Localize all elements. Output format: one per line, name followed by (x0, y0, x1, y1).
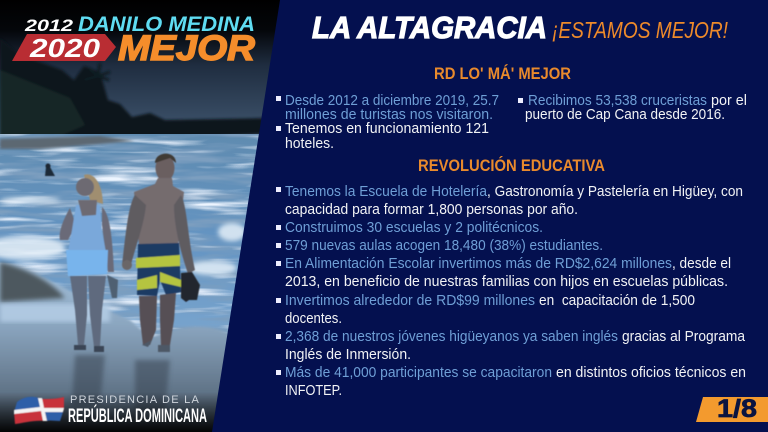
panel: navy content background (212, 0, 768, 432)
text block: education list: en capacitación de 1,500 (539, 292, 695, 309)
palm trees (0, 38, 270, 146)
text block: education list: capacidad para formar 1,800 personas por año. (285, 201, 578, 218)
page badge 1/8 (696, 395, 768, 423)
text block: education list: en distintos oficios técnicos en (556, 364, 746, 381)
text: República Dominicana: REPÚBLICA DOMINICANA (68, 405, 207, 427)
sea (0, 134, 270, 344)
text: Presidencia de la: PRESIDENCIA DE LA (70, 394, 200, 406)
text block: tourism left column: Tenemos en funcionamiento 121 (285, 120, 489, 137)
logo: campaign 2012-2020 (12, 13, 256, 68)
text block: education list: En Alimentación Escolar invertimos más de RD$2,624 millones (285, 255, 672, 272)
name Danilo Medina: DANILO MEDINA (78, 13, 255, 36)
text block: tourism left column: millones de turistas nos visitaron. (285, 106, 493, 123)
text block: tourism right column: por el (711, 92, 747, 109)
text block: education list: , Gastronomía y Pastelería en Higüey, con (487, 183, 743, 200)
icon: Dominican flag (14, 397, 64, 424)
logo: Presidencia de la República Dominicana (14, 394, 207, 427)
woman (60, 174, 118, 352)
heading: RD lo' má' mejor: RD LO' MÁ' MEJOR (434, 64, 571, 83)
red arrow 2020: 2020 (29, 33, 101, 63)
man (122, 154, 200, 352)
text block: education list: 2013, en beneficio de nuestras familias con hijos en escuelas públicas. (285, 273, 728, 290)
year 2012: 2012 (24, 16, 74, 35)
title: ¡ESTAMOS MEJOR! (552, 17, 728, 43)
text block: tourism right column: Recibimos 53,538 cruceristas (528, 92, 707, 109)
text block: education list: Inglés de Inmersión. (285, 346, 411, 363)
text block: education list: Tenemos la Escuela de Hotelería (285, 183, 488, 200)
text block: education list: , desde el (672, 255, 731, 272)
panel: beach photo (0, 0, 290, 432)
heading: Revolución educativa: REVOLUCIÓN EDUCATIVA (418, 156, 605, 175)
text block: tourism right column (518, 92, 747, 123)
text block: education list: Invertimos alrededor de RD$99 millones (285, 292, 535, 309)
text block: tourism left column: Desde 2012 a diciembre 2019, 25.7 (285, 92, 499, 109)
text block: education list (276, 183, 746, 399)
red arrow 2020 (12, 33, 116, 63)
text block: education list: docentes. (285, 310, 342, 327)
word Mejor: MEJOR (118, 29, 256, 68)
text block: education list: Más de 41,000 participantes se capacitaron (285, 364, 552, 381)
text block: education list: INFOTEP. (285, 382, 342, 399)
wet sand (0, 262, 232, 432)
text block: education list: gracias al Programa (622, 328, 746, 345)
page badge 1/8: 1/8 (717, 395, 757, 423)
text block: tourism left column (276, 92, 499, 152)
text block: education list: Construimos 30 escuelas y 2 politécnicos. (285, 219, 543, 236)
swimmer (45, 164, 55, 176)
text block: education list: 579 nuevas aulas acogen 18,480 (38%) estudiantes. (285, 237, 603, 254)
text block: education list: 2,368 de nuestros jóvenes higüeyanos ya saben inglés (285, 328, 618, 345)
text block: tourism left column: hoteles. (285, 135, 334, 152)
title (312, 10, 728, 45)
title: LA ALTAGRACIA (312, 10, 547, 45)
shaded bottom (0, 392, 290, 432)
text block: tourism right column: puerto de Cap Cana desde 2016. (525, 106, 725, 123)
